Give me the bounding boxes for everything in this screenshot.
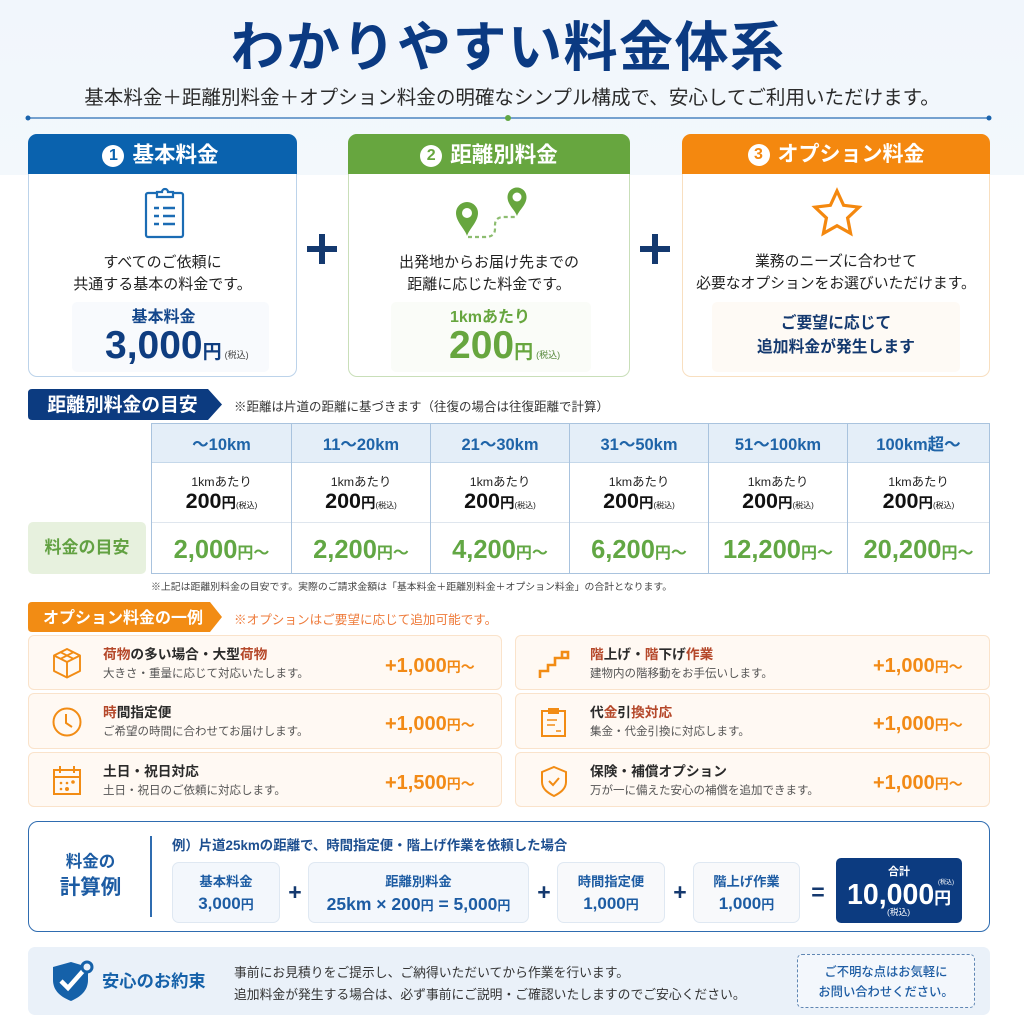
option row: time slot — [28, 693, 502, 749]
term: stairs work: 階上げ作業 — [713, 874, 780, 889]
option description: 建物内の階移動をお手伝いします。 — [590, 668, 773, 680]
option price: +1,000円～ — [873, 655, 963, 677]
option price: +1,000円～ — [873, 713, 963, 735]
contact callout: ご不明な点はお気軽に — [824, 965, 947, 979]
column: 51 to 100km: 1kmあたり — [748, 475, 808, 489]
column: 11 to 20km: 200円(税込) — [325, 489, 397, 513]
plus sign — [307, 234, 337, 264]
price value: 200円 (税込) — [449, 324, 560, 367]
option description: 万が一に備えた安心の補償を追加できます。 — [590, 785, 819, 797]
option price: +1,500円～ — [385, 772, 475, 794]
column: 11 to 20km: 11～20km — [323, 436, 399, 454]
column: over 100km: 20,200円～ — [863, 536, 974, 564]
option row: weekends and holidays — [28, 752, 502, 807]
total label: 合計 — [888, 866, 910, 878]
contact callout: お問い合わせください。 — [818, 984, 954, 998]
header band — [152, 424, 989, 463]
panel header: オプション料金 — [778, 143, 924, 166]
icon: invoice clipboard — [541, 708, 566, 737]
icon: box — [53, 648, 81, 678]
column: 51 to 100km: 12,200円～ — [723, 536, 833, 564]
column: 31 to 50km: 31～50km — [600, 436, 678, 454]
section heading: distance guide — [28, 389, 222, 420]
column: 11 to 20km: 2,200円～ — [313, 536, 409, 564]
option description: 大きさ・重量に応じて対応いたします。 — [103, 668, 309, 680]
term: basic fee: 3,000円 — [198, 894, 254, 913]
description: 必要なオプションをお選びいただけます。 — [696, 276, 976, 292]
panel header — [28, 134, 293, 174]
total — [836, 858, 962, 923]
promise text: 事前にお見積りをご提示し、ご納得いただいてから作業を行います。 — [234, 965, 629, 980]
option title: 階上げ・階下げ作業 — [590, 647, 713, 662]
panel header — [348, 134, 630, 174]
column: 21 to 30km: 4,200円～ — [452, 536, 548, 564]
plus sign — [640, 234, 670, 264]
price label: 1kmあたり — [450, 309, 530, 326]
icon: clipboard — [144, 188, 184, 238]
term: basic fee — [172, 862, 280, 923]
price label: 基本料金 — [131, 309, 196, 326]
plus operator: + — [288, 879, 302, 905]
term: time slot: 時間指定便 — [578, 874, 644, 889]
panel label: 計算例 — [60, 876, 121, 899]
column: over 100km: 1kmあたり — [888, 475, 949, 489]
price box — [72, 302, 269, 372]
option description: ご希望の時間に合わせてお届けします。 — [103, 726, 309, 738]
option price: +1,000円～ — [385, 655, 475, 677]
icon: star — [812, 187, 862, 236]
plus operator: + — [537, 879, 551, 905]
panel header: 2 — [427, 147, 436, 164]
description — [73, 254, 252, 292]
column: 21 to 30km: 21～30km — [461, 436, 539, 454]
panel: promise — [28, 947, 990, 1015]
term: stairs work: 1,000円 — [719, 894, 774, 913]
description: 距離に応じた料金です。 — [407, 276, 571, 292]
column: 21 to 30km: 1kmあたり — [470, 475, 530, 489]
panel header — [682, 134, 990, 174]
tax note: (税込) — [887, 907, 910, 917]
promise text — [234, 965, 746, 1002]
small tax mark: (税込) — [938, 880, 954, 886]
option row: cash on delivery — [515, 693, 990, 749]
option title: 荷物の多い場合・大型荷物 — [103, 647, 267, 662]
column: 11 to 20km — [292, 424, 431, 573]
column: over 100km — [863, 436, 974, 564]
option row: stairs work — [515, 635, 990, 690]
column: 21 to 30km — [431, 424, 570, 573]
icon: shield check — [541, 766, 567, 798]
icon: clock — [52, 708, 82, 736]
icon: route pins — [456, 188, 526, 238]
column: 31 to 50km: 200円(税込) — [603, 489, 675, 513]
column: up to 10km: 2,000円～ — [174, 536, 269, 564]
term: distance fee: 25km × 200円 = 5,000円 — [327, 894, 510, 914]
description: 業務のニーズに合わせて — [755, 254, 917, 270]
term: distance fee: 距離別料金 — [385, 874, 452, 889]
panel label: 料金の — [66, 853, 115, 871]
distance note: ※距離は片道の距離に基づきます（往復の場合は往復距離で計算） — [234, 400, 609, 414]
option title: 土日・祝日対応 — [103, 764, 199, 779]
promise text: 追加料金が発生する場合は、必ず事前にご説明・ご確認いたしますのでご安心ください。 — [234, 987, 746, 1002]
section heading: option examples: オプション料金の一例 — [43, 608, 203, 627]
title: わかりやすい料金体系 — [230, 18, 786, 78]
column: up to 10km: 1kmあたり — [191, 475, 252, 489]
option description: 集金・代金引換に対応します。 — [590, 726, 750, 738]
option title: 保険・補償オプション — [590, 764, 727, 779]
description: すべてのご依頼に — [103, 254, 222, 271]
option title: 時間指定便 — [103, 705, 171, 720]
column: 31 to 50km: 1kmあたり — [609, 475, 669, 489]
column: up to 10km — [152, 424, 292, 573]
term: time slot — [557, 862, 665, 923]
term: time slot: 1,000円 — [583, 894, 639, 913]
description — [399, 254, 579, 292]
price box — [391, 302, 591, 372]
column: 31 to 50km: 6,200円～ — [591, 536, 687, 564]
option title: 代金引換対応 — [590, 705, 672, 720]
row label: 料金の目安 — [44, 538, 130, 557]
description — [696, 253, 976, 292]
panel header: 距離別料金 — [450, 143, 558, 167]
callout — [712, 302, 960, 372]
contact callout — [797, 954, 975, 1008]
column: 51 to 100km: 200円(税込) — [742, 489, 814, 513]
column: 31 to 50km — [570, 424, 709, 573]
section heading: distance guide: 距離別料金の目安 — [47, 394, 198, 415]
total value: 10,000円 — [847, 879, 951, 911]
equals operator: = — [811, 879, 825, 905]
icon: stairs — [538, 650, 570, 678]
promise heading: 安心のお約束 — [102, 971, 206, 991]
panel: option fee — [682, 134, 990, 377]
option price: +1,000円～ — [873, 772, 963, 794]
column: 51 to 100km — [709, 424, 848, 573]
icon: calendar — [53, 766, 81, 795]
table footnote: ※上記は距離別料金の目安です。実際のご請求金額は「基本料金＋距離別料金＋オプション料金」の合計となります。 — [151, 582, 672, 593]
panel header: 1 — [109, 147, 118, 164]
option note: ※オプションはご要望に応じて追加可能です。 — [234, 613, 497, 627]
option row: large parcels — [28, 635, 502, 690]
column: up to 10km: 200円(税込) — [186, 489, 257, 513]
column: over 100km: 200円(税込) — [883, 489, 954, 513]
example description: 例）片道25kmの距離で、時間指定便・階上げ作業を依頼した場合 — [172, 838, 567, 853]
plus operator: + — [673, 879, 687, 905]
panel: distance fee — [348, 134, 630, 377]
subtitle: 基本料金＋距離別料金＋オプション料金の明確なシンプル構成で、安心してご利用いただけます。 — [84, 87, 940, 109]
divider — [26, 115, 992, 121]
panel: calculation example — [28, 821, 990, 932]
row line — [152, 522, 989, 523]
term: basic fee: 基本料金 — [199, 874, 253, 889]
background tint — [0, 0, 1024, 175]
panel: basic fee — [28, 134, 297, 377]
term: distance fee — [308, 862, 529, 923]
option description: 土日・祝日のご依頼に対応します。 — [103, 785, 286, 797]
vertical divider — [150, 836, 152, 917]
panel label — [60, 852, 121, 899]
callout: 追加料金が発生します — [757, 339, 915, 356]
description: 出発地からお届け先までの — [399, 254, 579, 271]
column: over 100km: 100km超～ — [876, 436, 961, 454]
column: 51 to 100km: 51～100km — [735, 436, 821, 454]
row label — [28, 522, 146, 574]
description: 共通する基本の料金です。 — [73, 276, 252, 292]
column: up to 10km: ～10km — [192, 436, 251, 454]
icon: shield with check — [53, 960, 94, 1001]
option price: +1,000円～ — [385, 713, 475, 735]
price value: 3,000円 (税込) — [105, 324, 249, 367]
column: 11 to 20km: 1kmあたり — [331, 475, 391, 489]
section heading: option examples — [28, 602, 222, 632]
panel header: 3 — [754, 146, 763, 163]
term: stairs work — [693, 862, 800, 923]
panel header: 基本料金 — [132, 143, 218, 167]
column: 21 to 30km: 200円(税込) — [464, 489, 536, 513]
option row: insurance — [515, 752, 990, 807]
distance table — [151, 423, 990, 574]
callout: ご要望に応じて — [781, 315, 891, 332]
